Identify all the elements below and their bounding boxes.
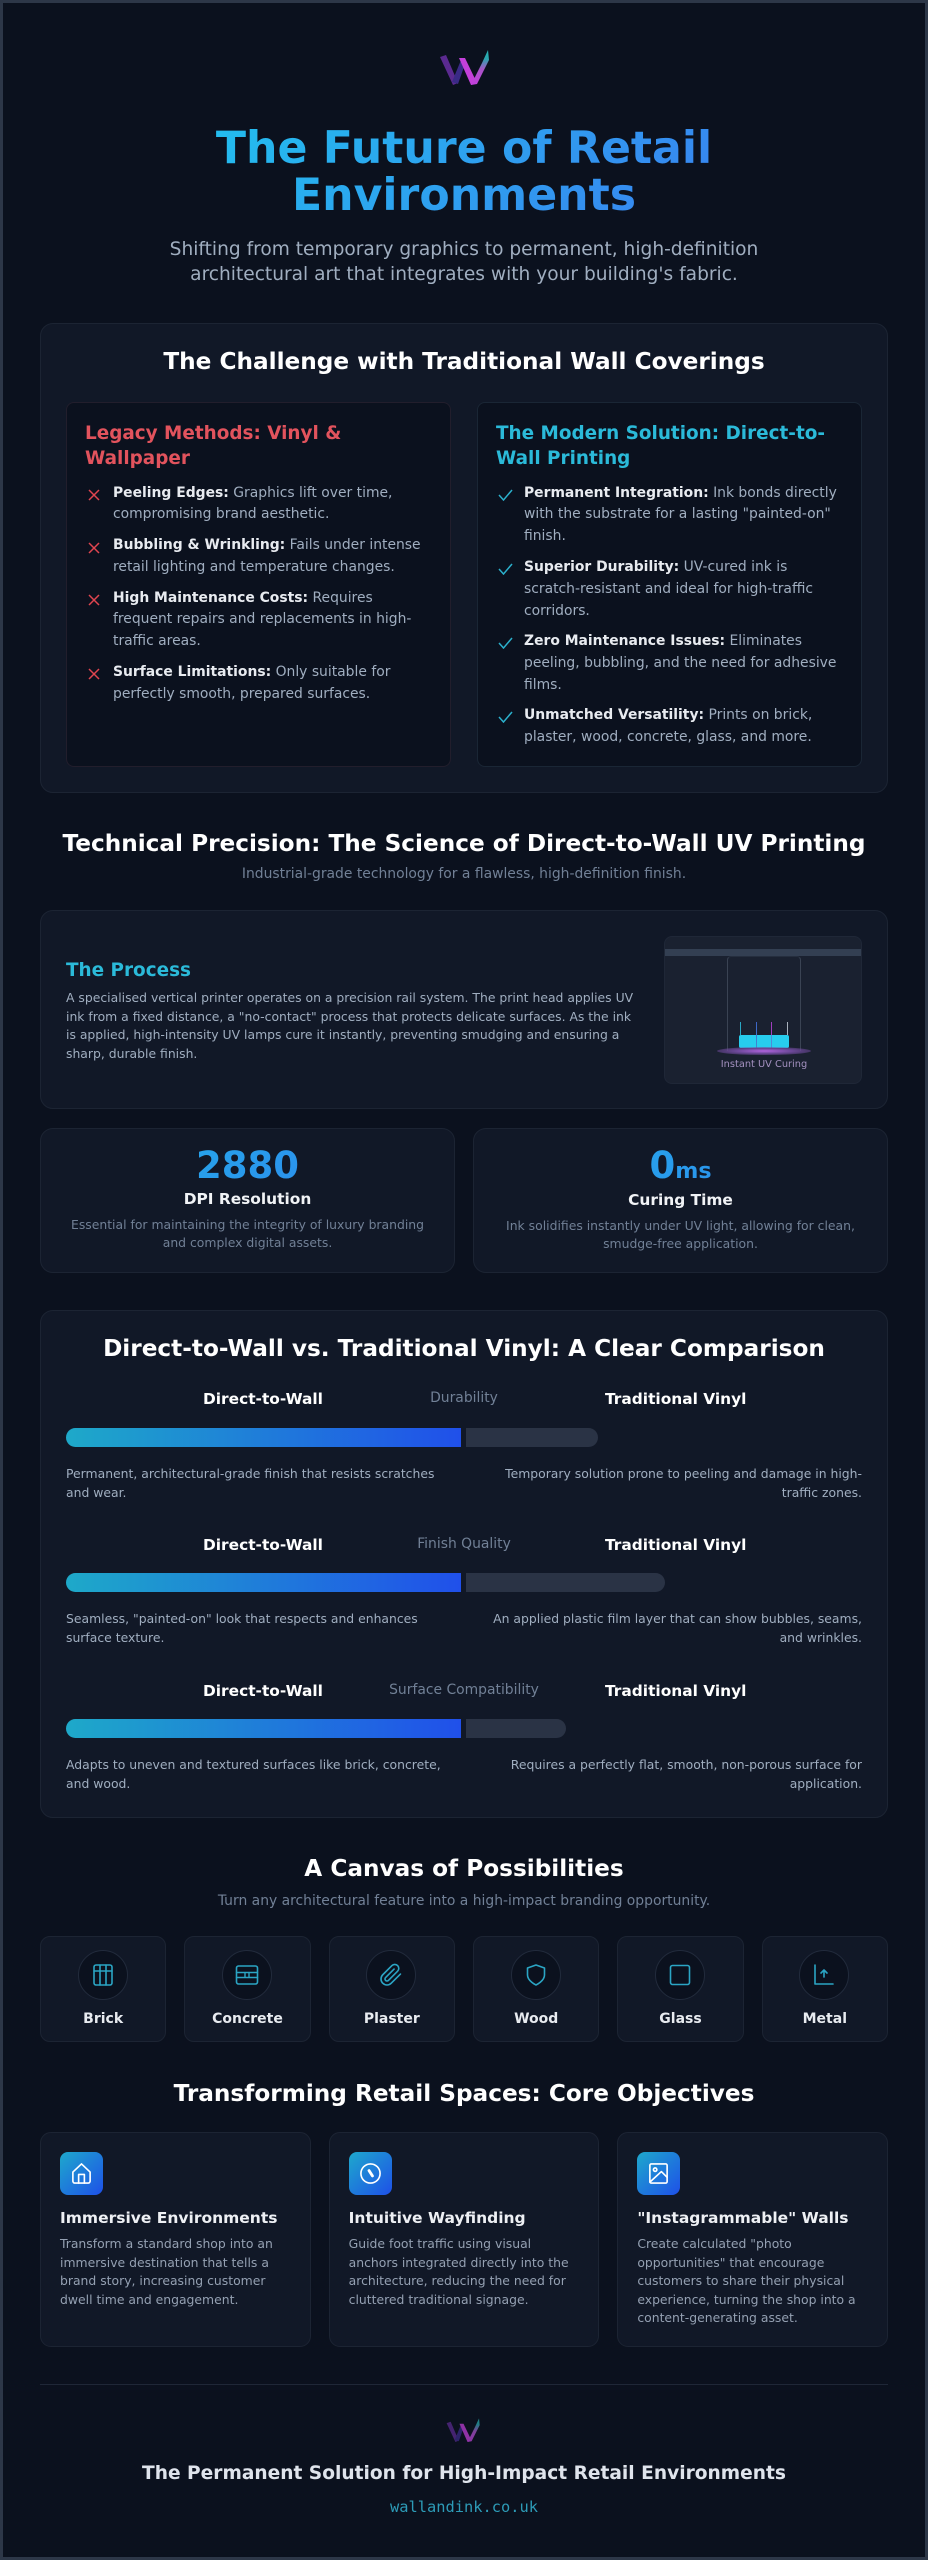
item: maintenance costs: High Maintenance Costs: Requires — [113, 590, 373, 606]
item: durability — [524, 559, 813, 618]
heading: canvas: A Canvas of Possibilities — [304, 1855, 624, 1882]
text: direct: Permanent, architectural-grade finish that resists scratches — [66, 1466, 434, 1481]
item: versatility: Unmatched Versatility: Prints on brick, — [524, 707, 812, 723]
panel: legacy methods — [66, 402, 451, 767]
item: bubbling — [113, 537, 421, 575]
description: cluttered traditional signage. — [349, 2292, 529, 2307]
logo — [440, 50, 489, 85]
icon: image — [637, 2152, 680, 2195]
label: category: Surface Compatibility — [389, 1682, 539, 1698]
icon: check — [498, 490, 512, 501]
icon: shield — [511, 1950, 561, 2000]
description: dwell time and engagement. — [60, 2292, 238, 2307]
icon: check — [498, 712, 512, 723]
card: metal — [762, 1936, 888, 2042]
description: opportunities" that encourage — [637, 2255, 824, 2270]
label: DPI Resolution — [184, 1190, 311, 1208]
value: 0ms — [649, 1144, 712, 1186]
label: Concrete — [212, 2011, 283, 2027]
cured ink block — [739, 1035, 789, 1048]
bar: vinyl — [466, 1573, 664, 1592]
item: maintenance costs: frequent repairs and replacements in high- — [113, 611, 411, 627]
description — [71, 1216, 424, 1250]
item: versatility — [524, 707, 812, 745]
description — [349, 2236, 569, 2307]
heading: challenge: The Challenge with Traditional Wall Coverings — [163, 348, 765, 375]
UV glow — [717, 1047, 811, 1055]
label: direct: Direct-to-Wall — [203, 1390, 323, 1408]
label: category: Durability — [430, 1390, 498, 1406]
value: 2880 — [196, 1144, 299, 1186]
icon: check — [498, 564, 512, 575]
comparison row: surface compatibility — [66, 1682, 862, 1791]
description: customers to share their physical — [637, 2273, 844, 2288]
icon: cross — [88, 594, 100, 606]
heading: comparison: Direct-to-Wall vs. Traditional Vinyl: A Clear Comparison — [103, 1335, 825, 1362]
text: direct: Seamless, "painted-on" look that respects and enhances — [66, 1611, 418, 1626]
description — [637, 2236, 856, 2325]
stat card: curing — [473, 1128, 888, 1273]
description: and complex digital assets. — [163, 1235, 332, 1250]
card: brick — [40, 1936, 166, 2042]
heading: modern: Wall Printing — [496, 448, 630, 469]
bar: vinyl — [466, 1719, 566, 1738]
item: permanent integration: with the substrate for a lasting "painted-on" — [524, 506, 831, 522]
heading: legacy: Legacy Methods: Vinyl & — [85, 423, 341, 444]
label: vinyl: Traditional Vinyl — [605, 1390, 746, 1408]
icon: check — [498, 638, 512, 649]
text: direct: Adapts to uneven and textured surfaces like brick, concrete, — [66, 1757, 441, 1772]
value — [474, 1144, 887, 1192]
footer tagline: The Permanent Solution for High-Impact Retail Environments — [142, 2462, 786, 2484]
text: process description: A specialised vertical printer operates on a precision rail system. The print head applies UV — [66, 990, 633, 1005]
item: peeling edges: Peeling Edges: Graphics lift over time, — [113, 485, 392, 501]
bar: direct — [66, 1428, 461, 1447]
title: Intuitive Wayfinding — [349, 2209, 526, 2227]
heading: modern: The Modern Solution: Direct-to- — [496, 423, 825, 444]
item: versatility: plaster, wood, concrete, glass, and more. — [524, 729, 812, 745]
text: vinyl: Requires a perfectly flat, smooth, non-porous surface for — [511, 1757, 862, 1772]
icon: paperclip — [366, 1950, 416, 2000]
description: Guide foot traffic using visual — [349, 2236, 531, 2251]
subtitle — [170, 239, 758, 285]
description: smudge-free application. — [603, 1236, 758, 1251]
icon: chart arrow — [799, 1950, 849, 2000]
stat card: DPI — [40, 1128, 455, 1273]
description: architecture, reducing the need for — [349, 2273, 566, 2288]
ink line cyan — [740, 1022, 741, 1035]
item: durability: Superior Durability: UV-cured ink is — [524, 559, 787, 575]
list: modern items — [498, 485, 837, 745]
text: direct — [66, 1757, 441, 1791]
text: vinyl: and wrinkles. — [780, 1630, 862, 1645]
description: brand story, increasing customer — [60, 2273, 265, 2288]
value — [41, 1144, 454, 1188]
bar: direct — [66, 1719, 461, 1738]
heading: legacy: Wallpaper — [85, 448, 190, 469]
item: maintenance costs — [113, 590, 411, 649]
item: permanent integration: finish. — [524, 528, 566, 544]
rail — [665, 949, 863, 956]
text: vinyl: Temporary solution prone to peeling and damage in high- — [505, 1466, 862, 1481]
heading: modern — [496, 423, 825, 469]
subheading: canvas: Turn any architectural feature into a high-impact branding opportunity. — [218, 1893, 710, 1909]
subtitle: architectural art that integrates with your building's fabric. — [190, 264, 738, 285]
heading: technical precision: Technical Precision: The Science of Direct-to-Wall UV Printing — [62, 830, 866, 857]
text: direct — [66, 1466, 434, 1500]
text: direct: and wear. — [66, 1485, 126, 1500]
item: peeling edges — [113, 485, 392, 522]
icon: brick — [78, 1950, 128, 2000]
card: concrete — [184, 1936, 311, 2042]
title: "Instagrammable" Walls — [637, 2209, 849, 2227]
footer url: wallandink.co.uk — [390, 2498, 538, 2516]
bar: vinyl — [466, 1428, 598, 1447]
subheading: technical: Industrial-grade technology for a flawless, high-definition finish. — [242, 866, 686, 882]
item: surface limitations — [113, 664, 390, 702]
item: permanent integration: Permanent Integration: Ink bonds directly — [524, 485, 837, 501]
label: Metal — [803, 2011, 847, 2027]
card: plaster — [329, 1936, 455, 2042]
panel: comparison — [40, 1310, 888, 1818]
item: durability: corridors. — [524, 602, 590, 618]
label: vinyl: Traditional Vinyl — [605, 1682, 746, 1700]
printer frame — [727, 956, 801, 1051]
text: direct — [66, 1611, 418, 1645]
text: direct: and wood. — [66, 1776, 130, 1791]
footer logo — [446, 2418, 480, 2442]
description: experience, turning the shop into a — [637, 2292, 856, 2307]
item: zero maintenance: peeling, bubbling, and the need for adhesive — [524, 655, 836, 671]
text: vinyl: traffic zones. — [782, 1485, 862, 1500]
item: maintenance costs: traffic areas. — [113, 633, 201, 649]
title: Environments — [292, 170, 636, 221]
item: zero maintenance: Zero Maintenance Issues: Eliminates — [524, 633, 802, 649]
ink line blue — [756, 1022, 757, 1048]
illustration: UV printer — [664, 936, 862, 1084]
subtitle: Shifting from temporary graphics to permanent, high-definition — [170, 239, 758, 260]
card: immersive — [40, 2132, 311, 2347]
title: The Future of Retail — [216, 123, 712, 174]
card: wayfinding — [329, 2132, 599, 2347]
icon: square — [655, 1950, 705, 2000]
caption: Instant UV Curing — [721, 1059, 807, 1070]
text: vinyl — [505, 1466, 862, 1500]
comparison row: durability — [66, 1390, 862, 1500]
title — [184, 125, 744, 219]
description: Transform a standard shop into an — [60, 2236, 273, 2251]
text: process description: ink from a fixed distance, a "no-contact" process that protects delicate surfaces. As the ink — [66, 1009, 631, 1024]
item: surface limitations: Surface Limitations: Only suitable for — [113, 664, 390, 680]
icon: home — [60, 2152, 103, 2195]
text: vinyl — [493, 1611, 862, 1645]
title: Immersive Environments — [60, 2209, 277, 2227]
text: process description: sharp, durable finish. — [66, 1046, 197, 1061]
label: direct: Direct-to-Wall — [203, 1682, 323, 1700]
label: direct: Direct-to-Wall — [203, 1536, 323, 1554]
icon: compass — [349, 2152, 392, 2195]
text: vinyl: application. — [790, 1776, 862, 1791]
item: durability: scratch-resistant and ideal for high-traffic — [524, 581, 813, 597]
label: Wood — [514, 2011, 558, 2027]
list: legacy items — [88, 485, 421, 702]
description — [506, 1218, 855, 1251]
text: vinyl — [511, 1757, 862, 1791]
text: direct: surface texture. — [66, 1630, 164, 1645]
bar: direct — [66, 1573, 461, 1592]
text: process description — [66, 990, 633, 1061]
panel: modern solution — [477, 402, 862, 767]
heading: the process: The Process — [66, 960, 191, 981]
description: content-generating asset. — [637, 2310, 798, 2325]
label: category: Finish Quality — [417, 1536, 511, 1552]
item: zero maintenance — [524, 633, 836, 692]
item: surface limitations: perfectly smooth, prepared surfaces. — [113, 686, 370, 702]
heading: legacy — [85, 423, 341, 469]
text: vinyl: An applied plastic film layer that can show bubbles, seams, — [493, 1611, 862, 1626]
item: bubbling: retail lighting and temperature changes. — [113, 559, 395, 575]
icon: cross — [88, 668, 100, 680]
card: wood — [473, 1936, 599, 2042]
description: immersive destination that tells a — [60, 2255, 269, 2270]
description: anchors integrated directly into the — [349, 2255, 569, 2270]
label: Brick — [83, 2011, 123, 2027]
description — [60, 2236, 273, 2307]
item: peeling edges: compromising brand aesthetic. — [113, 506, 329, 522]
label: Curing Time — [628, 1191, 733, 1209]
ink line magenta — [771, 1022, 772, 1048]
label: Plaster — [364, 2011, 420, 2027]
text: process description: is applied, high-intensity UV lamps cure it instantly, preventing smudging and ensuring a — [66, 1027, 619, 1042]
icon: concrete — [222, 1950, 272, 2000]
label: Glass — [659, 2011, 702, 2027]
item: permanent integration — [524, 485, 837, 544]
icon: cross — [88, 542, 100, 554]
panel: process — [40, 910, 888, 1109]
description: Create calculated "photo — [637, 2236, 792, 2251]
heading: core objectives: Transforming Retail Spaces: Core Objectives — [174, 2080, 754, 2107]
description: Essential for maintaining the integrity of luxury branding — [71, 1216, 424, 1232]
card: instagrammable — [617, 2132, 888, 2347]
card: glass — [617, 1936, 744, 2042]
ink line white — [787, 1022, 788, 1035]
item: bubbling: Bubbling & Wrinkling: Fails under intense — [113, 537, 421, 553]
icon: cross — [88, 490, 100, 500]
label: vinyl: Traditional Vinyl — [605, 1536, 746, 1554]
description: Ink solidifies instantly under UV light, allowing for clean, — [506, 1218, 855, 1232]
comparison row: finish quality — [66, 1536, 862, 1645]
item: zero maintenance: films. — [524, 676, 562, 692]
panel: challenge — [40, 323, 888, 793]
